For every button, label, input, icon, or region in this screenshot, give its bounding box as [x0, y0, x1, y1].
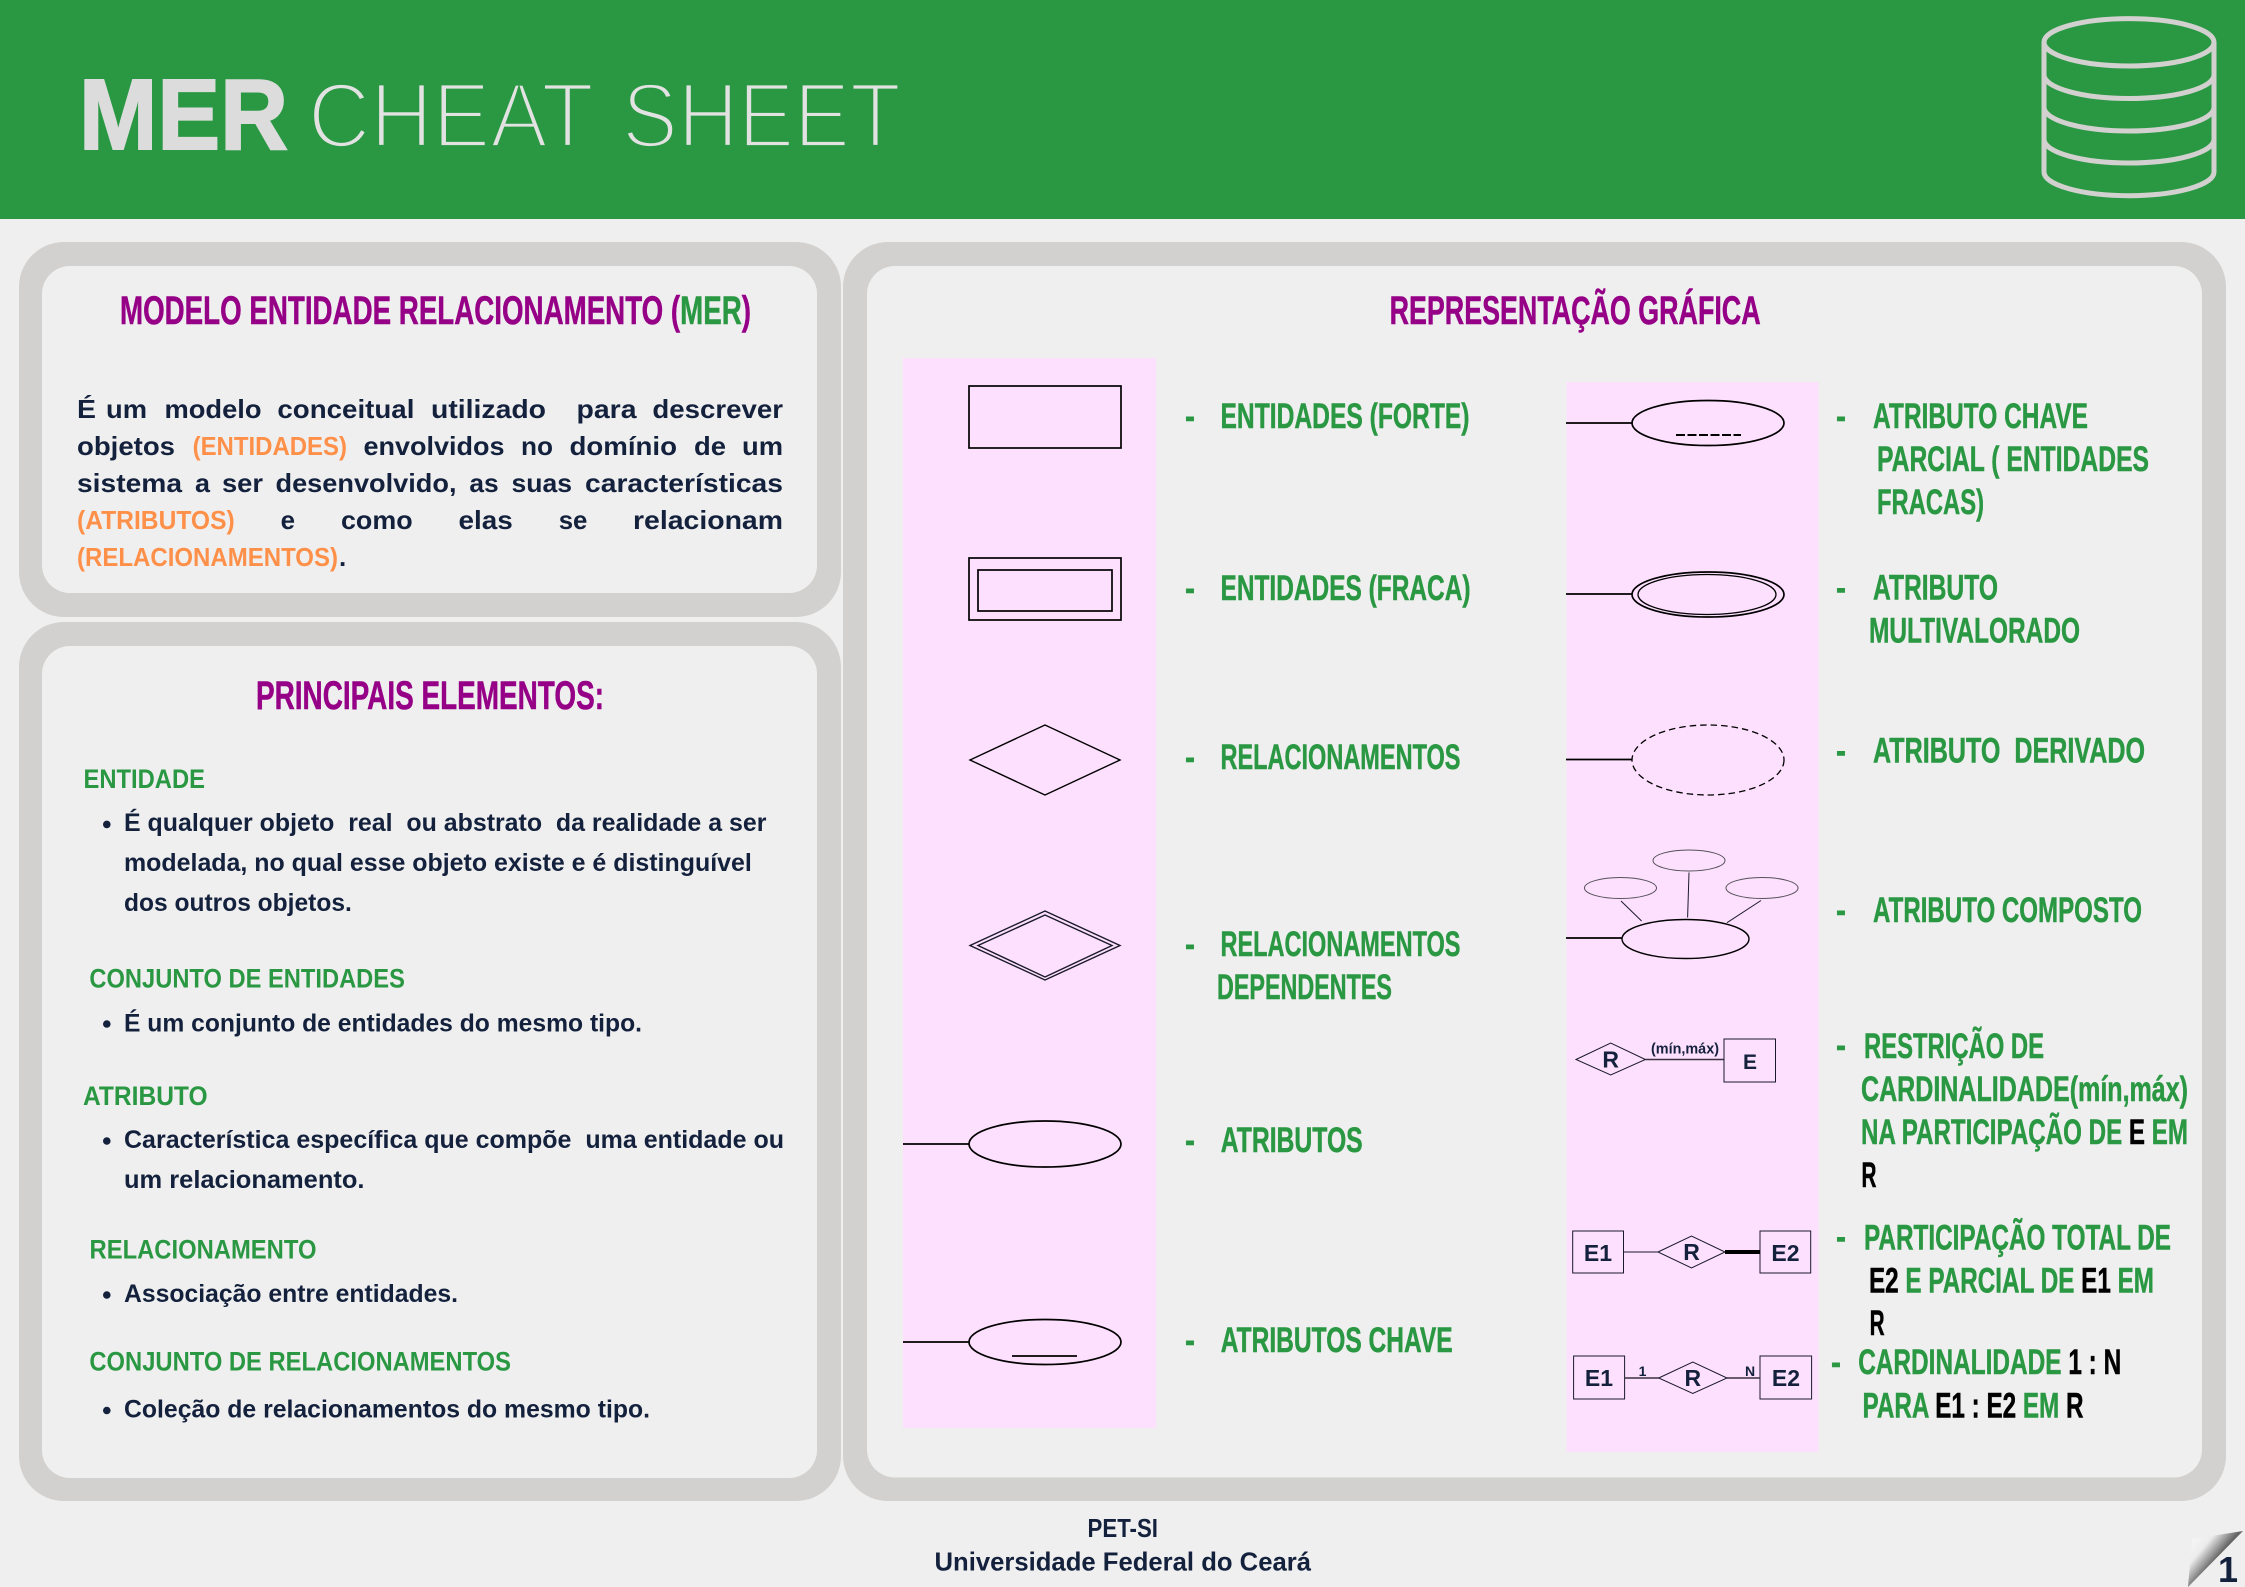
label: restrição de cardinalidade [1836, 1026, 2188, 1195]
header banner [0, 0, 2245, 219]
definition: atributo: um relacionamento. [124, 1166, 364, 1194]
label: restrição de cardinalidade: NA PARTICIPAÇÃO DE E EM [1861, 1113, 2188, 1152]
pink column: left notation [903, 358, 1156, 1428]
page number with corner fold [2188, 1531, 2243, 1587]
text block: definition of MER: (ATRIBUTOS) [77, 505, 235, 535]
definition: relacionamento [90, 1234, 458, 1308]
text block: definition of MER: . [339, 542, 346, 572]
label: relacionamentos dependentes: DEPENDENTES [1217, 968, 1392, 1007]
label: atributos chave [1185, 1321, 1453, 1360]
label: entidades fraca: - [1185, 569, 1195, 608]
text block: definition of MER: (ENTIDADES) [193, 431, 347, 461]
text block: definition of MER: descrever [652, 394, 783, 424]
text block: definition of MER: as [469, 468, 499, 498]
definition: conjunto de entidades: CONJUNTO DE ENTIDADES [89, 964, 405, 994]
text block: definition of MER: de [694, 431, 726, 461]
text block: definition of MER [77, 394, 783, 572]
label: restrição de cardinalidade: - [1836, 1026, 1846, 1065]
text block: definition of MER: características [585, 468, 783, 498]
icon: partial key attribute [1566, 400, 1784, 446]
text block: definition of MER: um [106, 394, 147, 424]
footer credit: PET-SI [1088, 1513, 1158, 1543]
label: atributo chave parcial [1836, 397, 2149, 522]
label: entidades forte [1185, 397, 1470, 436]
label: atributos chave: ATRIBUTOS CHAVE [1221, 1321, 1453, 1360]
icon: cardinality restriction diagram [1576, 1039, 1776, 1082]
icon: cardinality 1:N diagram: 1 [1639, 1363, 1647, 1379]
icon: cardinality 1:N diagram: N [1745, 1363, 1755, 1379]
icon: cardinality 1:N diagram: R [1684, 1365, 1701, 1391]
icon: relationship diamond [970, 725, 1120, 795]
label: atributo derivado: ATRIBUTO DERIVADO [1873, 732, 2145, 770]
label: atributo derivado [1836, 732, 2145, 770]
label: relacionamentos: RELACIONAMENTOS [1220, 738, 1460, 777]
label: relacionamentos dependentes [1185, 925, 1460, 1007]
label: atributo chave parcial: - [1836, 397, 1846, 436]
footer credit: Universidade Federal do Ceará [934, 1547, 1312, 1577]
label: restrição de cardinalidade: RESTRIÇÃO DE [1864, 1027, 2044, 1066]
label: atributo composto [1836, 891, 2142, 930]
title [79, 59, 901, 171]
text block: definition of MER: ser [222, 468, 263, 498]
label: participação total: - [1836, 1218, 1846, 1257]
definition: relacionamento: Associação entre entidades. [124, 1280, 458, 1308]
definition: atributo: ATRIBUTO [83, 1081, 208, 1111]
label: atributo derivado: - [1836, 732, 1846, 770]
heading: modelo entidade relacionamento: MODELO ENTIDADE RELACIONAMENTO (MER) [120, 289, 751, 333]
text block: definition of MER: domínio [570, 431, 677, 461]
text block: definition of MER: relacionam [633, 505, 783, 535]
icon: multivalued attribute [1566, 572, 1784, 617]
text block: definition of MER: desenvolvido, [276, 468, 456, 498]
label: cardinalidade 1:N [1831, 1343, 2121, 1426]
icon: cardinality restriction diagram: R [1602, 1046, 1619, 1072]
icon: weak entity double rectangle [969, 558, 1121, 620]
text block: definition of MER: suas [512, 468, 572, 498]
definition: atributo: Característica específica que compõe uma entidade ou [124, 1126, 784, 1154]
definition: atributo [83, 1081, 784, 1194]
label: atributos: - [1185, 1121, 1195, 1160]
label: cardinalidade 1:N: CARDINALIDADE 1 : N [1858, 1343, 2121, 1382]
icon: total participation diagram: E1 [1584, 1240, 1612, 1266]
icon: strong entity rectangle [969, 386, 1121, 448]
text block: definition of MER: envolvidos [364, 431, 504, 461]
label: restrição de cardinalidade: R [1862, 1156, 1876, 1195]
definition: conjunto de entidades [89, 964, 642, 1038]
pink column: right notation [1566, 382, 1818, 1452]
label: cardinalidade 1:N: - [1831, 1343, 1841, 1382]
label: atributos: ATRIBUTOS [1221, 1121, 1363, 1160]
definition: entidade: modelada, no qual esse objeto existe e é distinguível [124, 849, 752, 877]
text block: definition of MER: utilizado [431, 394, 546, 424]
label: atributo multivalorado: ATRIBUTO [1873, 569, 1998, 608]
label: atributo multivalorado: MULTIVALORADO [1869, 612, 2080, 651]
text block: definition of MER: modelo [164, 394, 262, 424]
text block: definition of MER: (RELACIONAMENTOS) [77, 542, 338, 572]
text block: definition of MER: a [195, 468, 211, 498]
label: entidades fraca: ENTIDADES (FRACA) [1220, 569, 1470, 608]
icon: cardinality 1:N diagram [1574, 1356, 1812, 1399]
text block: definition of MER: para [576, 394, 637, 424]
label: atributos [1185, 1121, 1363, 1160]
label: participação total [1836, 1218, 2171, 1343]
icon: cardinality 1:N diagram: E2 [1772, 1365, 1800, 1391]
icon: key attribute ellipse [903, 1320, 1121, 1364]
icon: attribute ellipse [903, 1121, 1121, 1167]
label: atributo composto: - [1836, 891, 1846, 930]
icon: cardinality 1:N diagram: E1 [1585, 1365, 1613, 1391]
label: atributo multivalorado [1836, 569, 2080, 651]
label: atributo multivalorado: - [1836, 569, 1846, 608]
label: relacionamentos [1185, 738, 1460, 777]
panel: principais elementos [19, 622, 841, 1501]
title: MER [79, 59, 288, 171]
label: entidades forte: ENTIDADES (FORTE) [1220, 397, 1470, 436]
definition: conjunto de entidades: É um conjunto de entidades do mesmo tipo. [124, 1009, 642, 1038]
definition: conjunto de relacionamentos: CONJUNTO DE RELACIONAMENTOS [89, 1346, 511, 1376]
footer credit [934, 1513, 1312, 1577]
label: relacionamentos: - [1185, 738, 1195, 777]
icon: dependent relationship double diamond [970, 911, 1120, 980]
label: cardinalidade 1:N: PARA E1 : E2 EM R [1862, 1386, 2084, 1426]
label: atributos chave: - [1185, 1321, 1195, 1360]
text block: definition of MER: como [341, 505, 413, 535]
definition: entidade [84, 764, 767, 917]
label: atributo chave parcial: ATRIBUTO CHAVE [1873, 397, 2088, 436]
title: CHEAT [308, 65, 594, 167]
label: atributo chave parcial: FRACAS) [1877, 483, 1984, 522]
icon: total participation diagram: R [1683, 1239, 1700, 1265]
icon: database [2044, 19, 2214, 196]
icon: cardinality restriction diagram: (mín,máx) [1651, 1040, 1719, 1058]
text block: definition of MER: É [77, 394, 96, 424]
definition: entidade: ENTIDADE [84, 764, 205, 794]
label: participação total: R [1870, 1304, 1885, 1343]
icon: total participation diagram: E2 [1771, 1240, 1800, 1266]
text block: definition of MER: no [521, 431, 553, 461]
text block: definition of MER: conceitual [277, 394, 414, 424]
label: relacionamentos dependentes: RELACIONAMENTOS [1220, 925, 1460, 964]
icon: cardinality restriction diagram: E [1743, 1051, 1757, 1074]
definition: entidade: É qualquer objeto real ou abstrato da realidade a ser [124, 808, 767, 837]
title: SHEET [622, 65, 901, 167]
definition: conjunto de relacionamentos: Coleção de relacionamentos do mesmo tipo. [124, 1396, 650, 1424]
icon: total participation diagram [1573, 1231, 1811, 1273]
icon: derived attribute [1566, 725, 1784, 795]
definition: entidade: dos outros objetos. [124, 889, 352, 917]
text block: definition of MER: e [281, 505, 295, 535]
text block: definition of MER: se [559, 505, 587, 535]
label: participação total: E2 E PARCIAL DE E1 EM [1869, 1262, 2154, 1300]
text block: definition of MER: elas [458, 505, 513, 535]
heading: representação gráfica: REPRESENTAÇÃO GRÁFICA [1390, 287, 1761, 333]
panel: representação gráfica [843, 242, 2226, 1501]
text block: definition of MER: um [742, 431, 783, 461]
definition: relacionamento: RELACIONAMENTO [90, 1234, 316, 1264]
icon: composite attribute [1566, 850, 1798, 958]
text block: definition of MER: objetos [77, 431, 175, 461]
label: entidades forte: - [1185, 397, 1195, 436]
label: entidades fraca [1185, 569, 1470, 608]
panel: modelo entidade relacionamento [19, 242, 841, 617]
definition: conjunto de relacionamentos [89, 1346, 650, 1424]
text block: definition of MER: sistema [77, 468, 183, 498]
heading: principais elementos: PRINCIPAIS ELEMENTOS: [256, 674, 604, 718]
label: relacionamentos dependentes: - [1185, 925, 1195, 964]
